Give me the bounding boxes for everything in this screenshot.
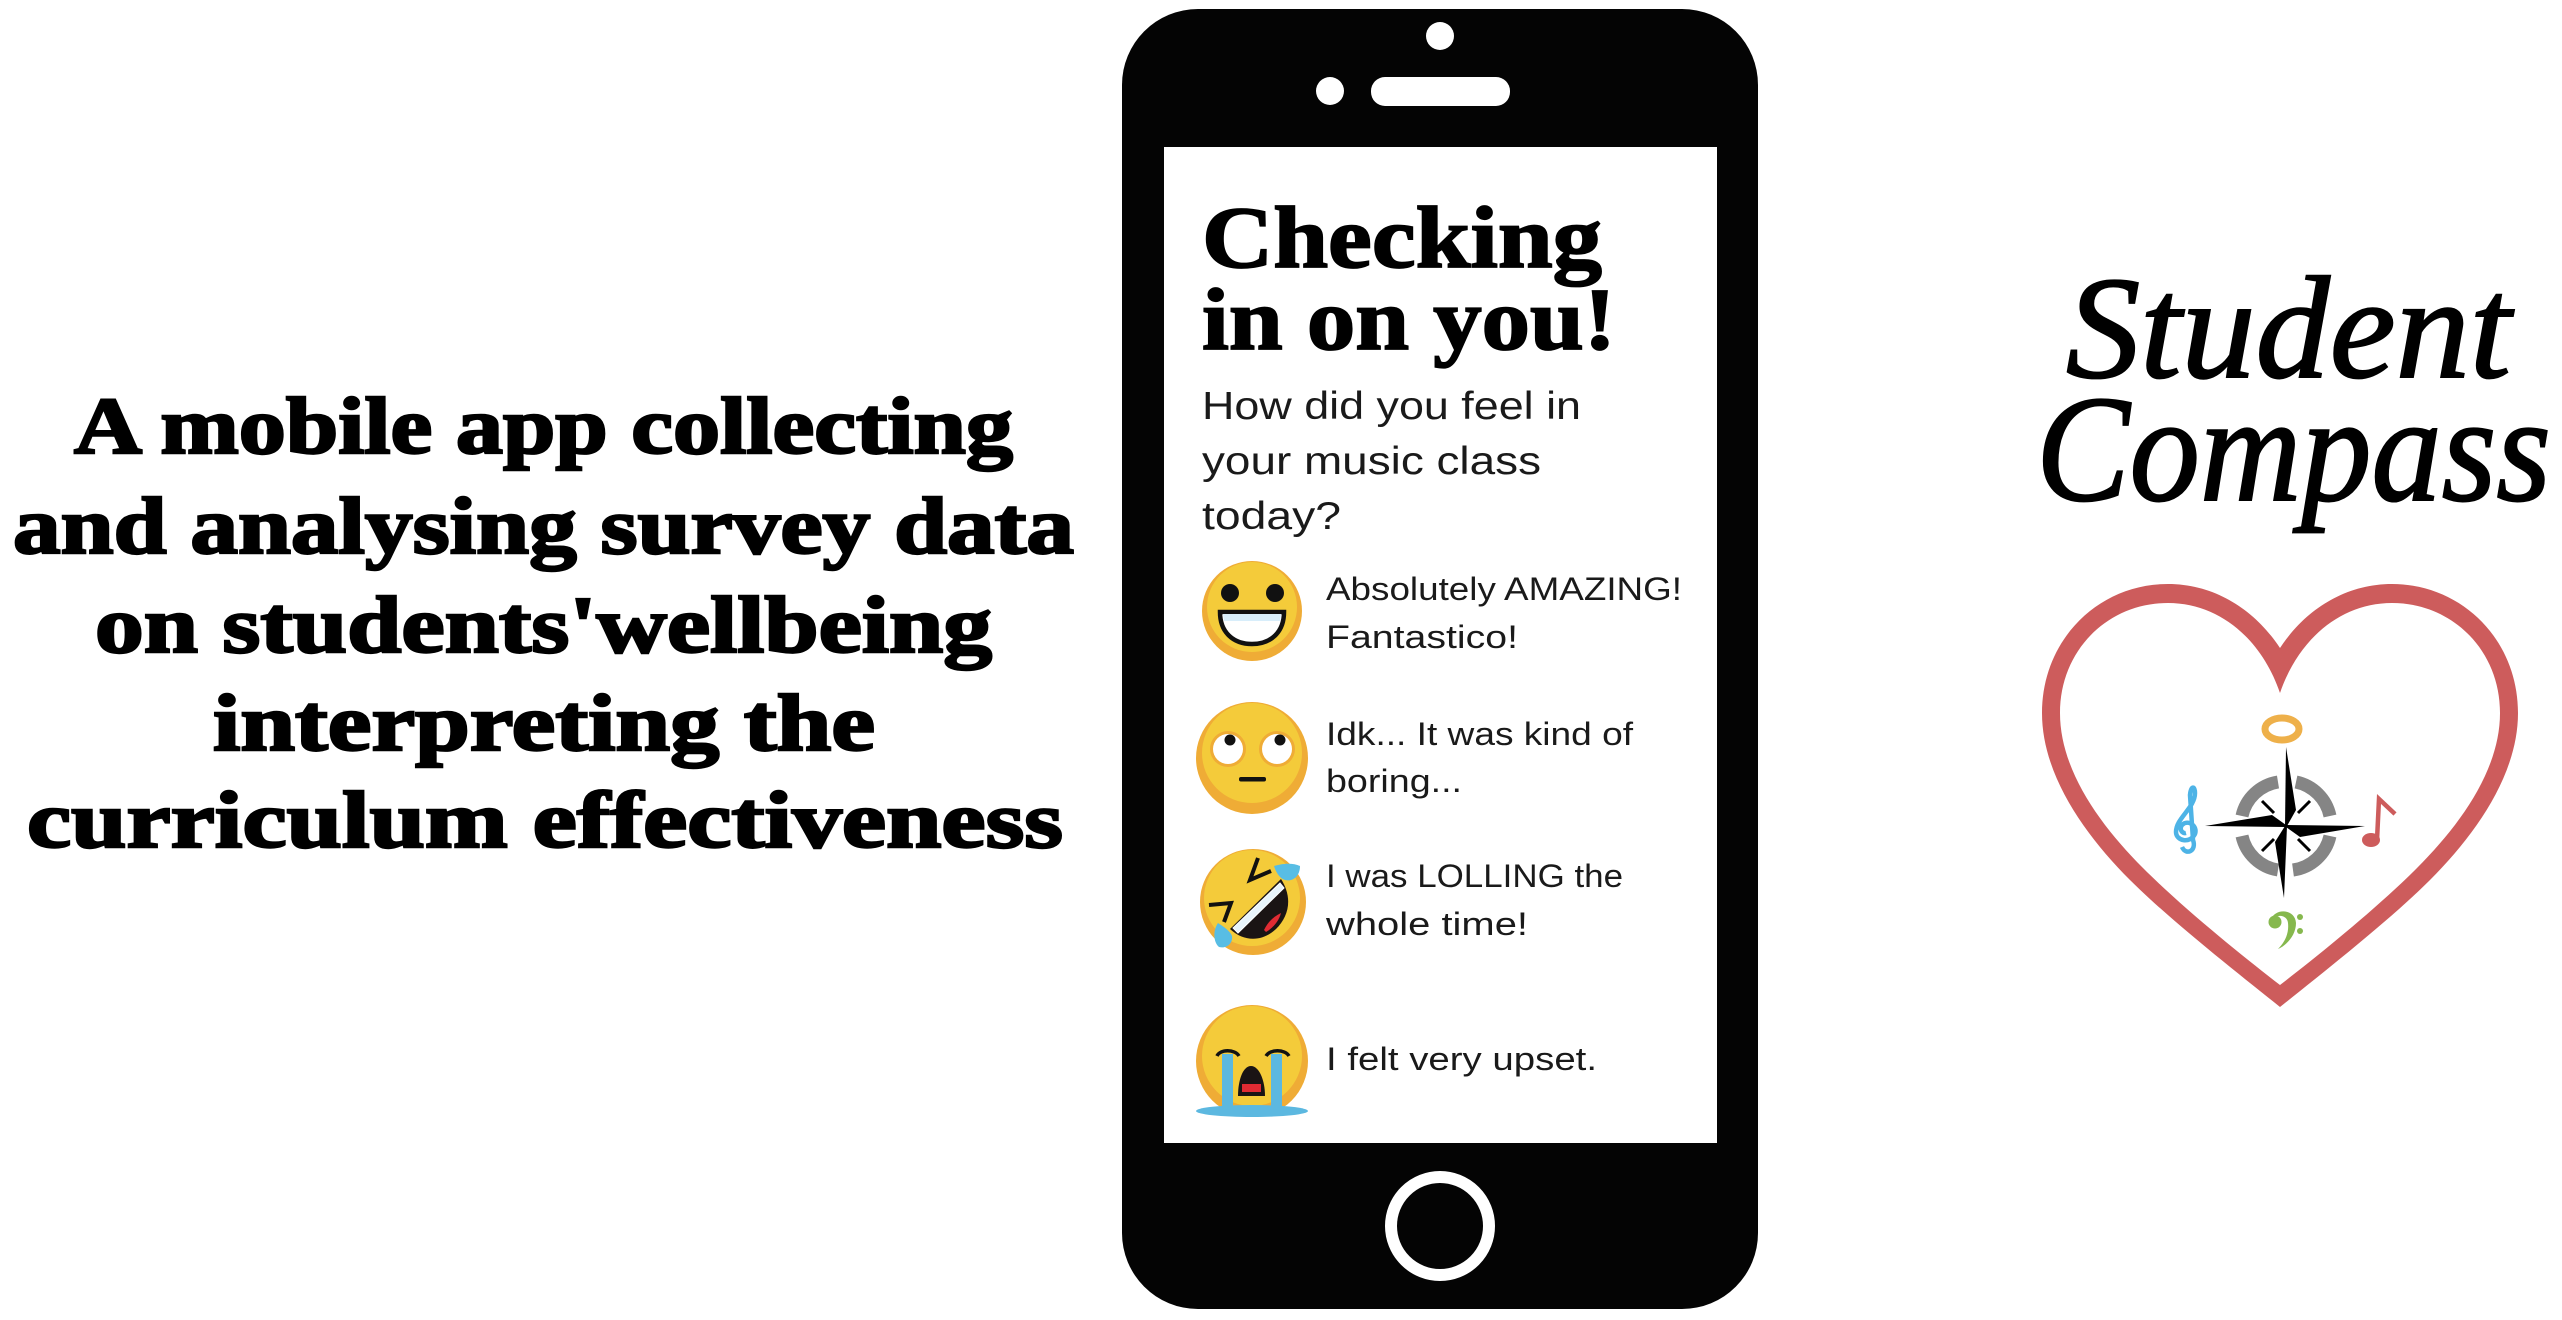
survey question: How did you feel in <box>1202 385 1581 428</box>
screen heading: Checking <box>1202 190 1602 287</box>
survey question <box>1202 385 1581 538</box>
note: whole note, orange <box>2265 718 2299 740</box>
answer options <box>1325 571 1682 1077</box>
survey question: today? <box>1202 495 1341 538</box>
answer options: boring... <box>1326 763 1462 799</box>
note: eighth note, red <box>2362 799 2395 847</box>
sensor dot <box>1316 77 1344 105</box>
answer options: Fantastico! <box>1326 619 1518 655</box>
screen heading <box>1202 190 1616 369</box>
compass needles <box>2205 747 2365 898</box>
compass ring <box>2242 782 2330 870</box>
phone screen <box>1164 147 1717 1143</box>
front camera <box>1426 22 1454 50</box>
text block: app description: on students'wellbeing <box>95 582 992 670</box>
answer options: I was LOLLING the <box>1326 858 1623 894</box>
speaker <box>1371 77 1510 106</box>
logo: heart with compass <box>2042 584 2518 1007</box>
answer options: Absolutely AMAZING! <box>1326 571 1682 607</box>
brand name: Student Compass <box>2036 247 2551 533</box>
text block: app description: interpreting the <box>213 680 875 768</box>
emoji: eye roll <box>1196 702 1308 814</box>
heart outline <box>2042 584 2518 1007</box>
phone body <box>1122 9 1758 1309</box>
survey question: your music class <box>1202 440 1541 483</box>
brand name: Student Compass: Student <box>2066 247 2514 409</box>
emoji: grinning <box>1202 561 1302 661</box>
text block: app description <box>13 383 1074 865</box>
phone mockup <box>1122 9 1758 1309</box>
emoji: rolling laughing <box>1200 849 1306 955</box>
note: treble clef, blue <box>2176 788 2196 852</box>
answer options: whole time! <box>1325 906 1528 942</box>
emoji: crying <box>1196 1005 1308 1117</box>
text block: app description: and analysing survey data <box>13 483 1074 571</box>
text block: app description: curriculum effectiveness <box>27 777 1063 865</box>
answer options: Idk... It was kind of <box>1326 716 1633 752</box>
answer options: I felt very upset. <box>1326 1041 1597 1077</box>
screen heading: in on you! <box>1202 272 1616 369</box>
home button <box>1391 1177 1489 1275</box>
note: bass clef, green <box>2268 911 2303 949</box>
text block: app description: A mobile app collecting <box>74 383 1013 471</box>
